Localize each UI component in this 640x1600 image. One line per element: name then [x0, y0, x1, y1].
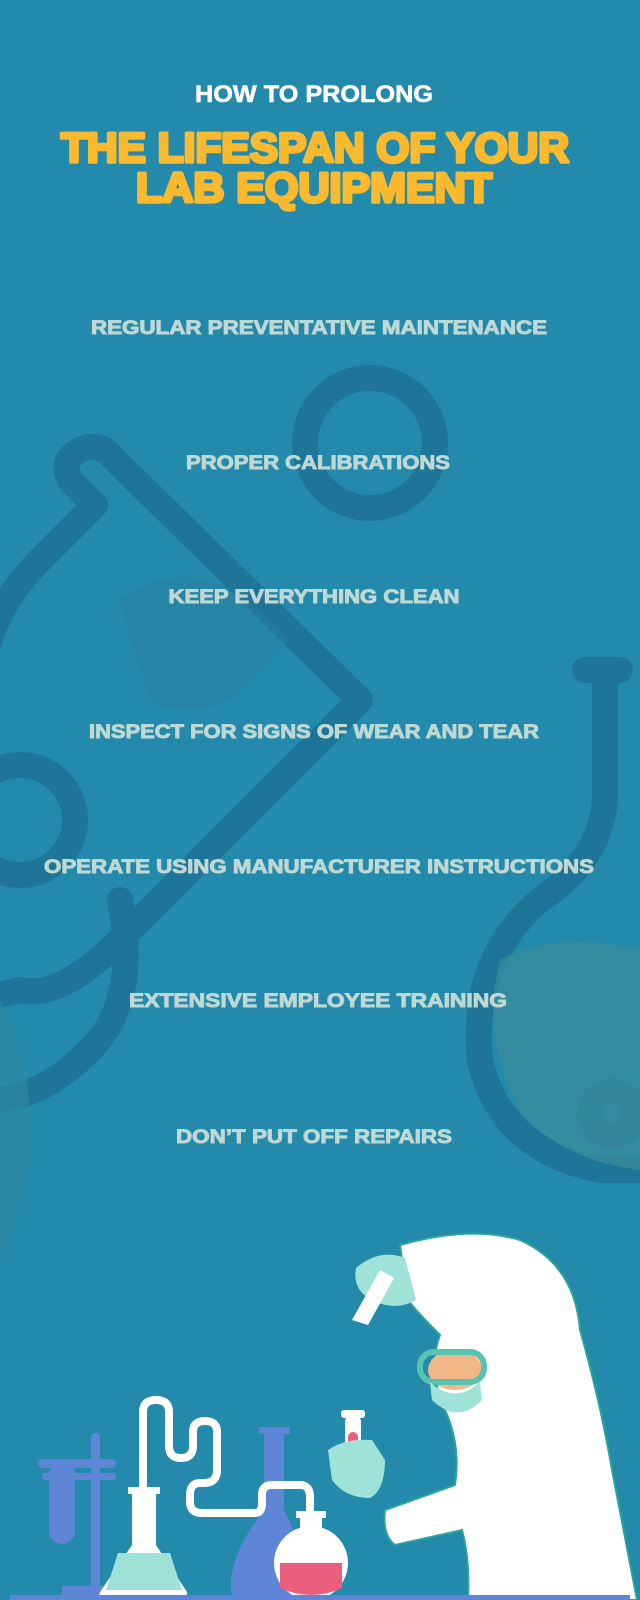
- illustration: lab scene: [10, 1234, 637, 1600]
- table: [10, 1595, 630, 1600]
- list of tips: EXTENSIVE EMPLOYEE TRAINING: [129, 991, 507, 1012]
- tube: [143, 1400, 310, 1515]
- blue flask behind: [231, 1427, 304, 1597]
- title: HOW TO PROLONG: [195, 81, 433, 108]
- round flask: [296, 1511, 326, 1518]
- scientist: [384, 1234, 637, 1600]
- list of tips: KEEP EVERYTHING CLEAN: [168, 587, 460, 608]
- list of tips: [44, 318, 594, 1148]
- list of tips: INSPECT FOR SIGNS OF WEAR AND TEAR: [89, 722, 539, 743]
- title: LAB EQUIPMENT: [136, 164, 492, 211]
- list of tips: REGULAR PREVENTATIVE MAINTENANCE: [91, 318, 547, 339]
- face & goggles: [428, 1350, 482, 1390]
- test tube rack: [38, 1433, 152, 1598]
- list of tips: DON’T PUT OFF REPAIRS: [176, 1127, 452, 1148]
- gloves: [355, 1255, 416, 1306]
- list of tips: OPERATE USING MANUFACTURER INSTRUCTIONS: [44, 857, 594, 878]
- background decoration: tilted flask left: [0, 378, 640, 1170]
- title: THE LIFESPAN OF YOUR: [61, 124, 569, 171]
- conical flask: [100, 1487, 187, 1597]
- list of tips: PROPER CALIBRATIONS: [186, 453, 450, 474]
- title: [61, 81, 569, 211]
